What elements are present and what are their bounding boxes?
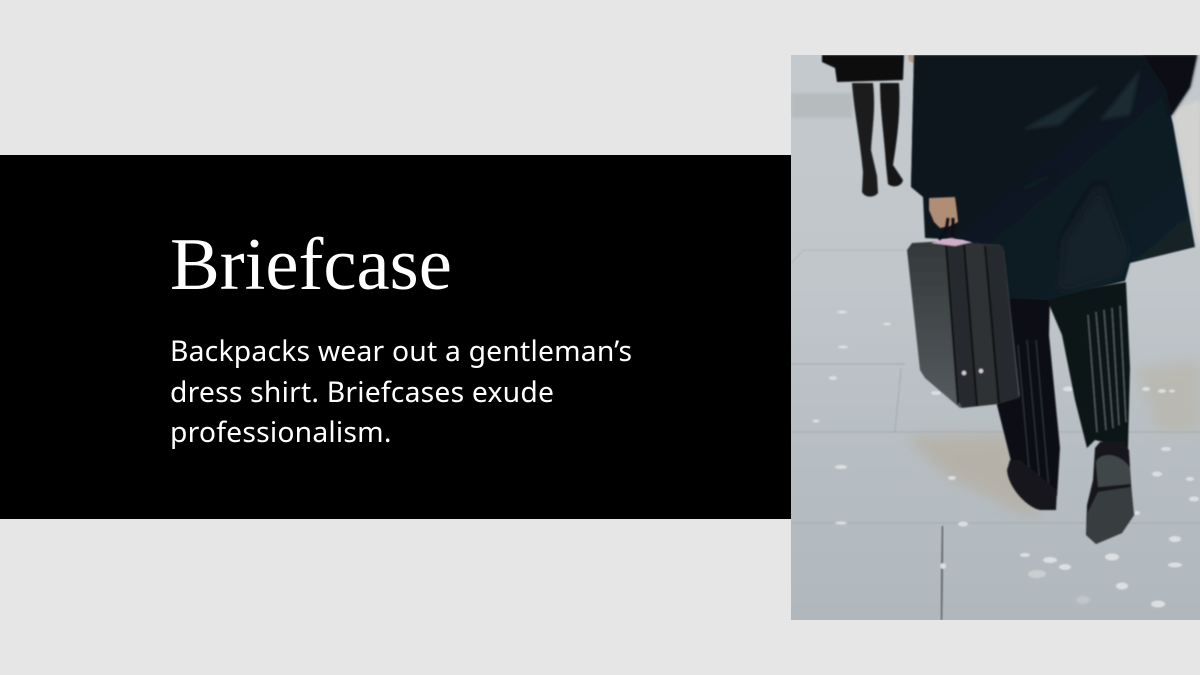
briefcase [907,218,1020,408]
coat [911,55,1197,300]
pavement [791,55,1200,620]
hand [929,197,958,228]
title: Briefcase [170,223,452,306]
trousers and shoes [997,282,1134,544]
body text: professionalism. [170,413,392,451]
background pedestrian [822,55,915,197]
body text: Backpacks wear out a gentleman’s [170,332,632,370]
photo: businessman walking with briefcase [791,55,1200,620]
panel: black text band [0,155,791,519]
body text: dress shirt. Briefcases exude [170,372,554,410]
body text [170,332,632,451]
